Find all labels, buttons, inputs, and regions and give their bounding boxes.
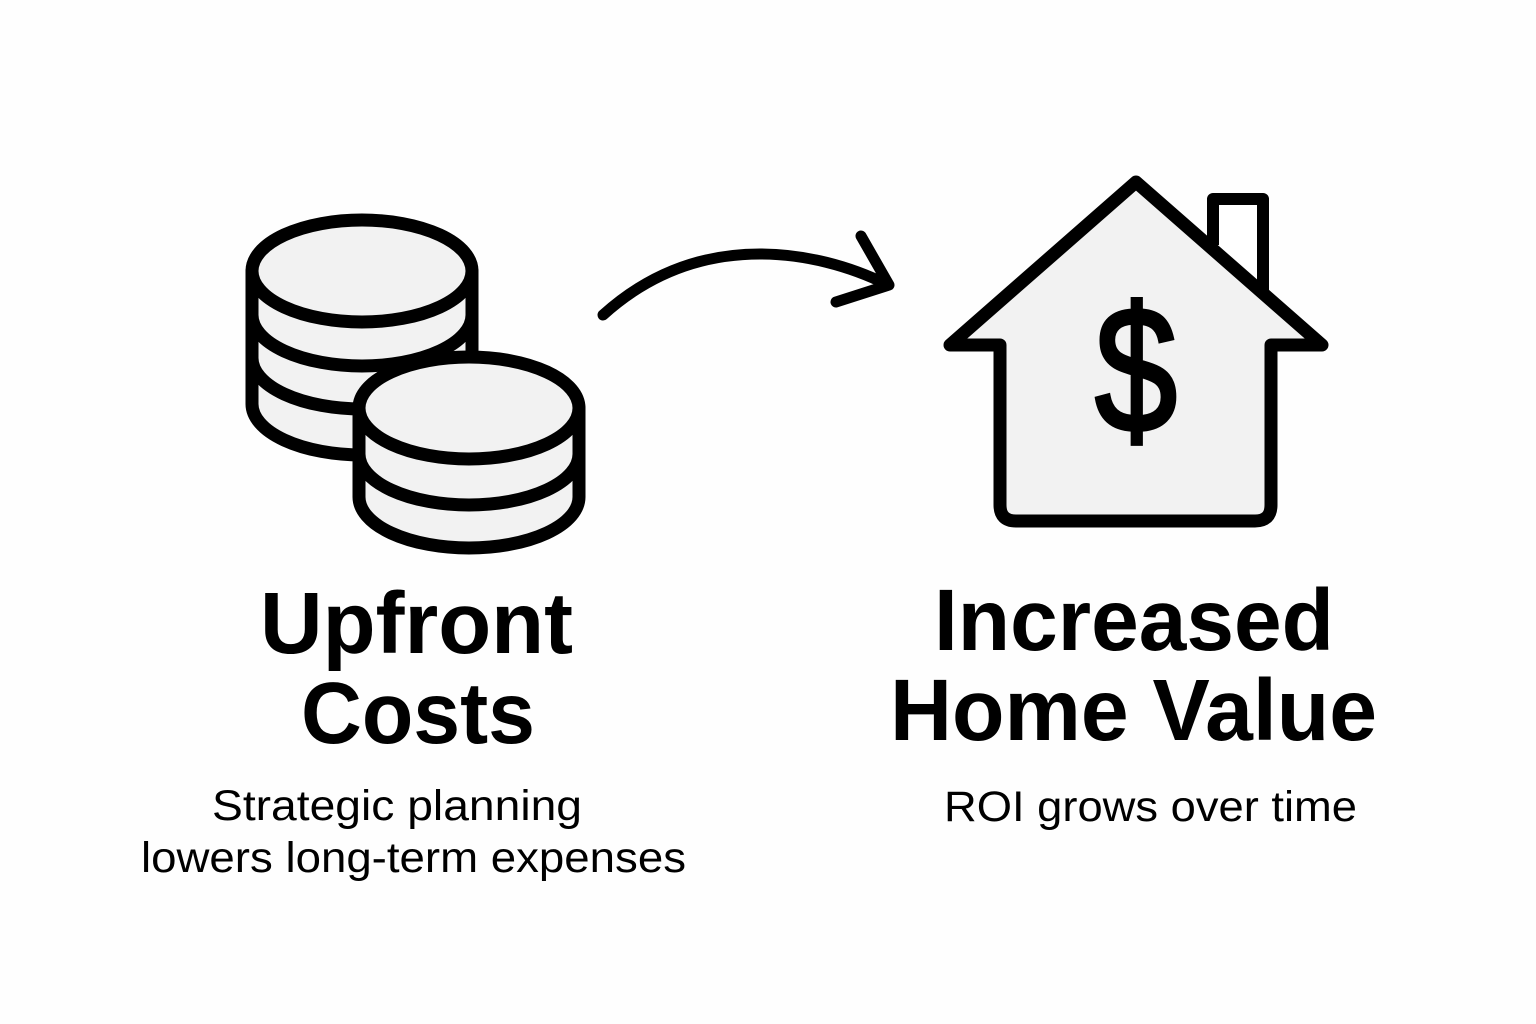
front coin stack [359, 357, 579, 548]
heading: upfront costs: Costs [301, 665, 535, 762]
heading: increased home value [890, 572, 1377, 759]
heading: increased home value: Increased [934, 572, 1334, 669]
text: upfront costs description: Strategic planning [212, 782, 582, 830]
arrow: costs to home value [603, 236, 889, 315]
text: ROI description: ROI grows over time [944, 783, 1357, 831]
icon: stacked coins [252, 220, 579, 548]
heading: upfront costs: Upfront [260, 575, 573, 672]
text: upfront costs description: lowers long-term expenses [141, 834, 686, 882]
heading: increased home value: Home Value [890, 662, 1377, 759]
icon: house with dollar sign [950, 182, 1322, 521]
house outline [950, 182, 1322, 521]
dollar sign: $ [1095, 269, 1177, 470]
heading: upfront costs [260, 575, 573, 762]
back coin stack [252, 220, 472, 455]
text: upfront costs description [141, 782, 686, 882]
chimney [1213, 199, 1263, 295]
